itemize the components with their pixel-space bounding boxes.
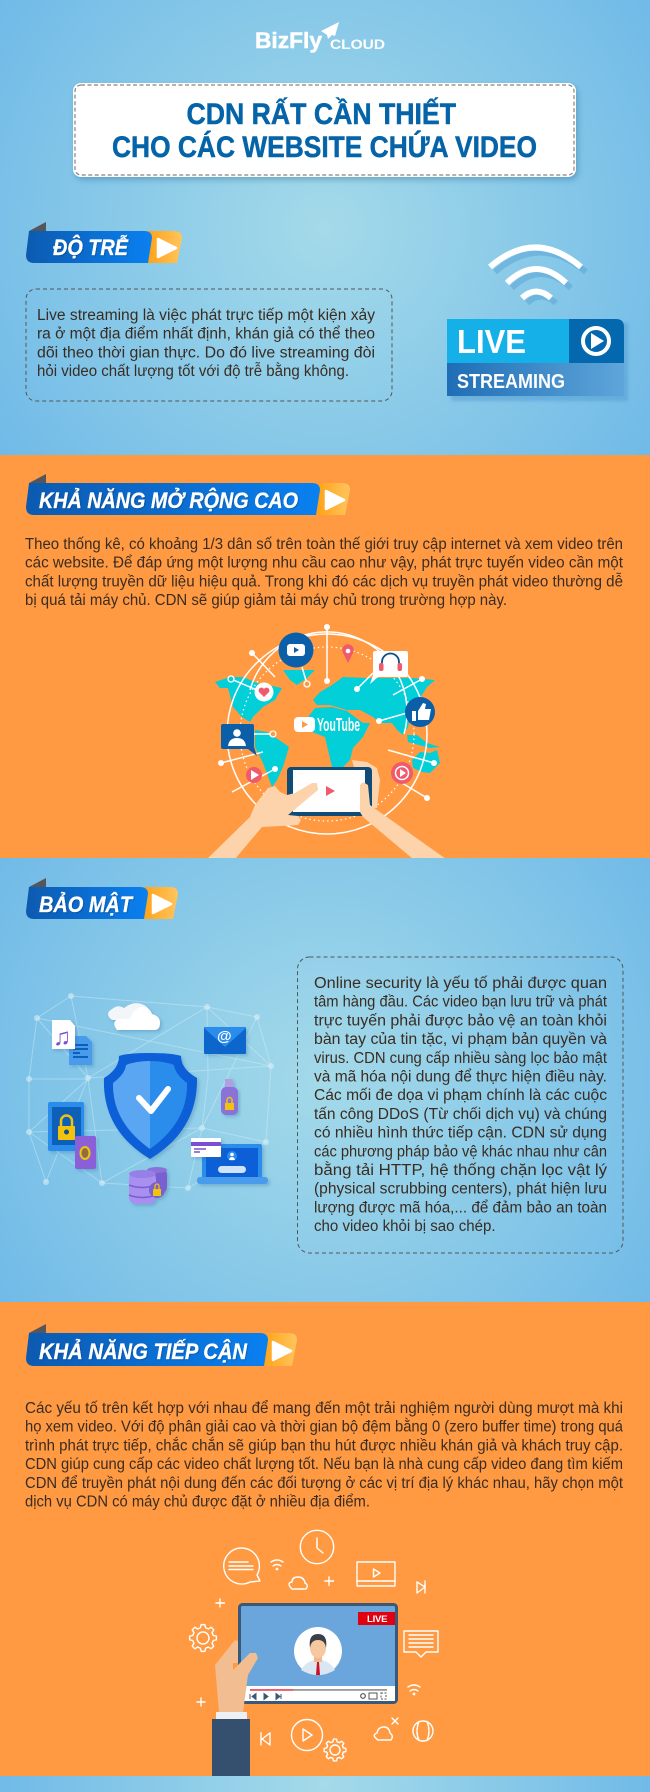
- heading badge: scalability: KHẢ NĂNG MỞ RỘNG CAO: [39, 488, 298, 513]
- panel: scalability: [0, 455, 650, 859]
- icon: usb drive: [221, 1079, 238, 1115]
- logo: BizFly Cloud: [255, 22, 385, 53]
- network mesh: [26, 993, 274, 1191]
- icon: tablet with lock: [48, 1102, 84, 1151]
- heading badge: accessibility: [26, 1324, 297, 1366]
- icon: cloud bottom: [374, 1727, 392, 1740]
- tablet with live video: [240, 1604, 396, 1702]
- icon: gear bottom: [324, 1739, 346, 1761]
- heading badge: latency: [26, 222, 182, 263]
- text block: latency: [26, 289, 392, 401]
- live streaming sign: LIVE: [457, 323, 526, 360]
- icon: plus: [216, 1599, 224, 1607]
- icon: heart: [254, 682, 274, 702]
- icon: ball: [413, 1721, 433, 1741]
- panel: latency: [0, 0, 650, 455]
- heading badge: accessibility: KHẢ NĂNG TIẾP CẬN: [39, 1339, 248, 1364]
- hand and sleeve: [212, 1640, 258, 1776]
- icon: plus: [325, 1577, 334, 1586]
- text block: security: và mã hóa nội dung để thực hiện điều này.: [314, 1068, 607, 1086]
- text block: security: cho video khỏi bị sao chép.: [314, 1218, 496, 1235]
- text block: security: Online security là yếu tố phải được quan: [314, 975, 607, 992]
- text block: security: bằng tải HTTP, hệ thống chặn lọc vật lý: [314, 1162, 607, 1179]
- icon: chat bubble: [224, 1548, 260, 1584]
- icon: map pin: [342, 644, 354, 663]
- text block: security: Các mối đe dọa vi phạm chính là các cuộc: [314, 1087, 607, 1104]
- text block: security: lượng được mã hóa,... để đảm bảo an toàn: [314, 1199, 607, 1216]
- text block: accessibility: Các yếu tố trên kết hợp với nhau để mang đến một trải nghiệm người dùng mượt mà khi: [25, 1400, 623, 1417]
- youtube logo: [294, 715, 360, 735]
- icon: note bubble: [404, 1631, 438, 1657]
- icon: music file: ♫: [53, 1024, 71, 1051]
- icon: cross: [392, 1718, 398, 1724]
- icon: skip back: [261, 1733, 270, 1745]
- text block: security: [298, 957, 623, 1253]
- text block: latency: ra ở một địa điểm nhất định, khán giả có thể theo: [37, 326, 375, 343]
- live streaming sign: STREAMING: [457, 371, 565, 393]
- heading badge: latency: ĐỘ TRỄ: [53, 235, 129, 260]
- text block: security: tấn công DDoS (Từ chối dịch vụ) và chúng: [314, 1106, 607, 1123]
- illustration: security shield and devices: [26, 993, 274, 1204]
- heading badge: scalability: [26, 474, 350, 515]
- text block: scalability: chất lượng truyền dữ liệu hiệu quả. Trong khi đó các dịch vụ truyền phát video thường dễ: [25, 573, 623, 590]
- icon: laptop with login: [197, 1144, 268, 1184]
- icon: clock: [300, 1530, 334, 1564]
- icon: headphones card: [370, 651, 408, 684]
- text block: scalability: các website. Để đáp ứng một lượng nhu cầu cao như vậy, phát trực tuyến video cần một: [25, 555, 624, 572]
- heading badge: security: [26, 878, 178, 919]
- panel: security: [0, 858, 650, 1302]
- icon: thumbs up: [405, 697, 435, 727]
- text block: security: trực tuyến phải được bảo vệ an toàn khỏi: [314, 1012, 607, 1029]
- title card: [73, 83, 576, 177]
- network rings and nodes: [218, 624, 437, 834]
- icon: video player: [357, 1562, 395, 1586]
- icon: document: [69, 1036, 92, 1065]
- text block: security: tâm hàng đầu. Các video bạn lưu trữ và phát: [314, 994, 608, 1011]
- icon: person card: [221, 724, 257, 756]
- heading badge: security: BẢO MẬT: [39, 892, 133, 917]
- text block: latency: dõi theo thời gian thực. Do đó live streaming đòi: [37, 344, 375, 361]
- text block: scalability: Theo thống kê, có khoảng 1/3 dân số trên toàn thế giới truy cập internet và xem video trên: [25, 536, 623, 553]
- world map: [215, 670, 440, 787]
- icon: database with lock: [129, 1167, 167, 1204]
- title card: CDN RẤT CẦN THIẾT: [186, 97, 456, 131]
- icon: music file: [52, 1020, 75, 1051]
- text block: security: có nhiều hình thức tiếp cận. CDN sử dụng: [314, 1125, 607, 1142]
- icon: mail: [204, 1027, 246, 1054]
- logo: BizFly Cloud: CLOUD: [330, 36, 385, 52]
- logo: BizFly Cloud: BizFly: [255, 28, 323, 53]
- icon: phone with fingerprint: [75, 1136, 96, 1169]
- hands: [207, 782, 446, 859]
- icon: play bubble: [246, 767, 262, 783]
- icon: plus: [197, 1698, 205, 1706]
- text block: accessibility: dịch vụ CDN có máy chủ được đặt ở nhiều địa điểm.: [25, 1494, 370, 1510]
- icon: wifi top: [271, 1560, 283, 1570]
- icon: wifi right: [408, 1685, 420, 1695]
- illustration: world map with social icons and tablet: [207, 624, 446, 859]
- icon: shield with check: [104, 1053, 197, 1159]
- live streaming sign: [447, 319, 628, 401]
- icon: skip forward: [417, 1581, 425, 1593]
- text block: latency: hỏi video chất lượng tốt với độ trễ bằng không.: [37, 363, 349, 380]
- text block: latency: Live streaming là việc phát trực tiếp một kiện xảy: [37, 307, 375, 324]
- label: LIVE: [358, 1612, 395, 1625]
- text block: security: bàn tay của tin tặc, vi phạm bản quyền và: [314, 1031, 607, 1048]
- presenter avatar: [294, 1627, 342, 1675]
- tablet: [287, 767, 372, 816]
- hand behind tablet: [352, 760, 380, 808]
- icon: cloud: [108, 1003, 160, 1030]
- text block: security: virus. CDN cung cấp nhiều sàng lọc bảo mật: [314, 1050, 608, 1067]
- icon: gear left: [190, 1625, 216, 1651]
- illustration: live video on tablet: [190, 1530, 438, 1776]
- youtube logo: YouTube: [317, 715, 360, 735]
- text block: accessibility: CDN giúp cung cấp các video chất lượng tốt. Nếu bạn là nhà cung cấp video đang tìm kiếm: [25, 1456, 623, 1473]
- text block: security: (physical scrubbing centers), phát hiện lưu: [314, 1181, 607, 1198]
- icon: play target: [391, 762, 413, 784]
- text block: accessibility: trình phát trực tiếp, chắc chắn sẽ giúp bạn thu hút được nhiều khán giả và khách truy cập.: [25, 1437, 623, 1454]
- title card: CHO CÁC WEBSITE CHỨA VIDEO: [112, 130, 537, 164]
- text block: accessibility: [25, 1400, 624, 1510]
- icon: credit card: [191, 1138, 221, 1157]
- text block: scalability: bị quá tải máy chủ. CDN sẽ giúp giảm tải máy chủ trong trường hợp này.: [25, 592, 507, 609]
- icon: video circle: [278, 632, 314, 668]
- text block: accessibility: CDN để truyền phát nội dung đến các đối tượng ở các vị trí địa lý khác nhau, hãy chọn một: [25, 1475, 624, 1492]
- label: LIVE: LIVE: [367, 1614, 388, 1625]
- text block: security: các phương pháp bảo vệ khác nhau như cân: [314, 1143, 607, 1160]
- text block: scalability: [25, 536, 624, 609]
- panel: footer strip: [0, 1776, 650, 1792]
- icon: mail: @: [217, 1028, 232, 1045]
- text block: accessibility: họ xem video. Với độ phân giải cao và thời gian bộ đệm bằng 0 (zero buffer time) trong quá: [25, 1419, 623, 1436]
- icon: play circle: [292, 1720, 322, 1750]
- icon: cloud top: [289, 1577, 307, 1589]
- panel: accessibility: [0, 1302, 650, 1776]
- icon: wifi signal: [490, 248, 586, 303]
